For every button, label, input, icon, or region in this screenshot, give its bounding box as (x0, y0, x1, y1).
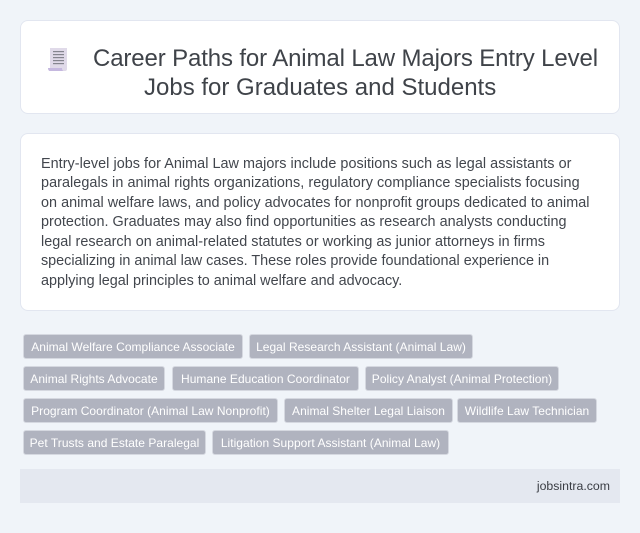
description panel (20, 133, 620, 311)
icon: document scroll (48, 48, 67, 71)
description text (41, 156, 590, 289)
tag (23, 430, 206, 455)
tag: Humane Education Coordinator (181, 372, 350, 386)
tag (172, 366, 359, 391)
description text: protection. Graduates may also find opportunities as research analysts conducting (41, 214, 567, 230)
footer bar (20, 469, 620, 503)
tag (23, 366, 165, 391)
description text: legal research on animal-related statutes or working as junior attorneys in firms (41, 234, 545, 250)
description text: specializing in animal law cases. These roles provide foundational experience in (41, 253, 549, 269)
description text: paralegals in animal rights organizations, regulatory compliance specialists focusing (41, 175, 580, 191)
description text: Entry-level jobs for Animal Law majors include positions such as legal assistants or (41, 156, 571, 172)
header panel (20, 20, 620, 114)
tag (365, 366, 559, 391)
tag (23, 334, 243, 359)
tag: Policy Analyst (Animal Protection) (372, 372, 552, 386)
description text: applying legal principles to animal welfare and advocacy. (41, 273, 402, 289)
footer site name: jobsintra.com (537, 479, 610, 493)
tag (457, 398, 597, 423)
tag: Animal Welfare Compliance Associate (31, 340, 235, 354)
tag (23, 398, 278, 423)
tag: Animal Rights Advocate (30, 372, 158, 386)
title: Career Paths for Animal Law Majors Entry Level (93, 45, 598, 72)
title (93, 45, 598, 101)
tag: Animal Shelter Legal Liaison (292, 404, 445, 418)
tag: Program Coordinator (Animal Law Nonprofit) (31, 404, 270, 418)
tag: Pet Trusts and Estate Paralegal (30, 436, 199, 450)
tag (284, 398, 453, 423)
tag: Wildlife Law Technician (465, 404, 589, 418)
tag (249, 334, 473, 359)
tag (212, 430, 449, 455)
title: Jobs for Graduates and Students (144, 74, 496, 101)
tag: Litigation Support Assistant (Animal Law) (221, 436, 440, 450)
tag list (23, 334, 597, 455)
description text: on animal welfare laws, and policy advocates for nonprofit groups dedicated to animal (41, 195, 590, 211)
tag: Legal Research Assistant (Animal Law) (256, 340, 466, 354)
